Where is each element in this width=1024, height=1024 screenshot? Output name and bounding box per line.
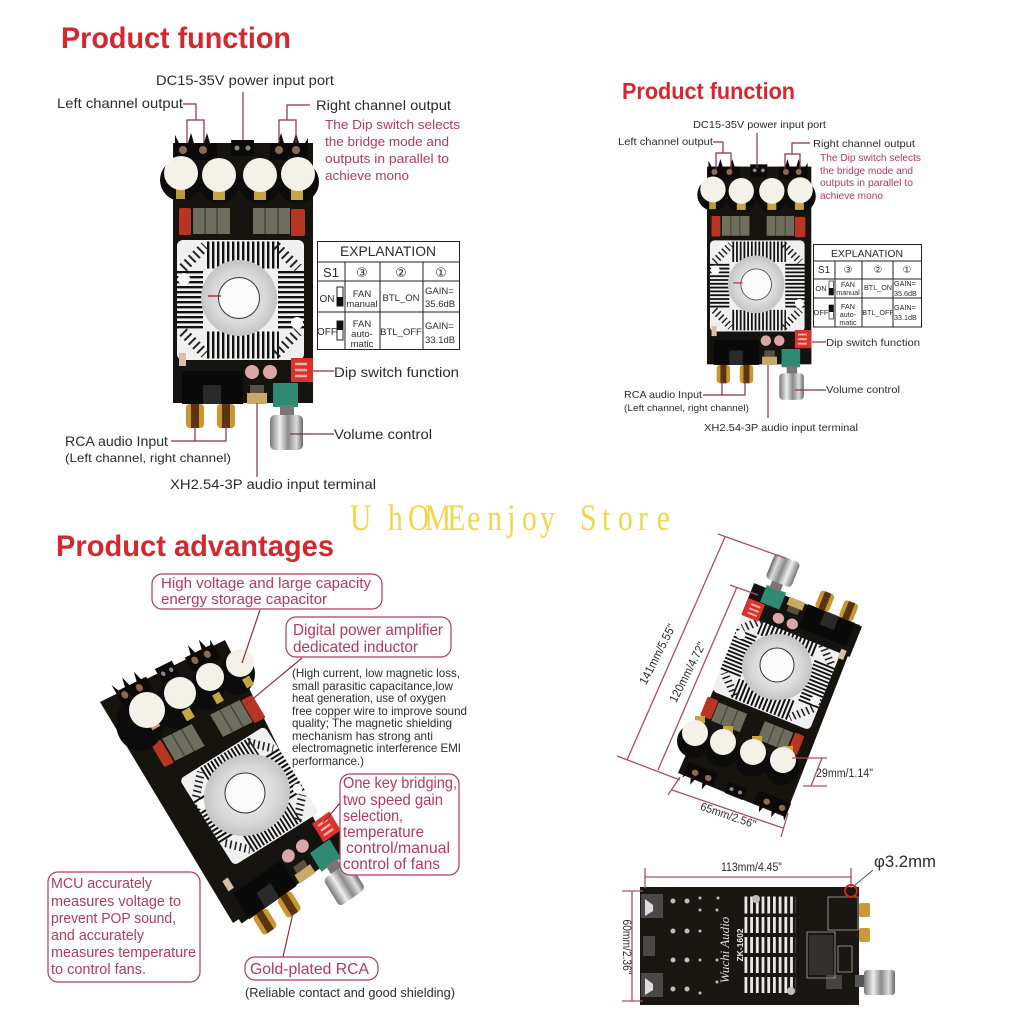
callout: gold-plated rca: Gold-plated RCA: [250, 961, 369, 978]
label: right channel output small: Right channel output: [813, 138, 915, 150]
volume knob: [855, 970, 895, 995]
text block: inductor details: electromagnetic interference EMI: [292, 741, 461, 755]
callout: mcu: measures voltage to: [51, 893, 181, 910]
table: explanation small: ON: [815, 284, 827, 293]
text block: inductor details: small parasitic capacitance,low: [292, 679, 453, 693]
label: dip switch function small: Dip switch function: [826, 337, 920, 349]
label: rca audio input small: RCA audio Input: [624, 389, 702, 401]
table: explanation small: 35.6dB: [894, 289, 917, 298]
callout: mounting hole 3.2mm: [845, 852, 936, 897]
note: dip switch mono small: the bridge mode and: [820, 166, 913, 177]
tilted board illustration: [677, 550, 875, 822]
dimension: 60mm height: 60mm/2.36": [620, 920, 632, 974]
table: explanation small: ②: [874, 265, 882, 276]
dimension: 120mm length: [658, 585, 758, 770]
table: explanation: BTL_ON: [383, 293, 420, 304]
callout: gold-plated rca: [245, 913, 378, 980]
note: dip switch mono small: outputs in parallel to: [820, 178, 913, 189]
label: right channel output small: [785, 138, 915, 170]
callout: mcu: and accurately: [51, 927, 144, 944]
callout: mounting hole 3.2mm: φ3.2mm: [874, 852, 936, 871]
text block: inductor details: performance.): [292, 754, 364, 768]
gold rca connectors: [859, 903, 870, 942]
title: product advantages: Product advantages: [56, 530, 334, 563]
callout: one key bridging: control of fans: [343, 856, 440, 873]
panel: board diagram small: [618, 119, 922, 434]
label: power input port small: [693, 119, 826, 168]
label: rca audio input: (Left channel, right channel): [65, 451, 231, 465]
table: explanation: ③: [356, 266, 368, 281]
table: explanation: 33.1dB: [425, 335, 455, 346]
dimension: 65mm width: [668, 777, 788, 837]
board illustration small: [697, 159, 816, 400]
table: explanation: matic: [351, 339, 374, 350]
panel: board rear view: [620, 852, 936, 1005]
table: explanation small: GAIN=: [894, 279, 916, 288]
note: dip switch mono: the bridge mode and: [325, 134, 449, 149]
label: xh2.54 terminal small: XH2.54-3P audio input terminal: [704, 422, 858, 434]
label: dip switch function: Dip switch function: [334, 364, 459, 380]
table: explanation: FAN: [353, 289, 371, 300]
panel: board dimensions view: [617, 534, 875, 837]
note: dip switch mono: achieve mono: [325, 168, 409, 183]
text block: inductor details: heat generation, use of oxygen: [292, 691, 446, 705]
note: dip switch mono small: achieve mono: [820, 191, 883, 202]
text block: rca note: (Reliable contact and good shielding): [245, 986, 455, 1000]
note: dip switch mono: outputs in parallel to: [325, 151, 449, 166]
table: explanation small: S1: [818, 265, 831, 276]
callout: capacitor: [152, 574, 382, 663]
text block: inductor details: [292, 666, 467, 768]
dimension: 60mm height: [620, 891, 643, 1001]
table: explanation small: EXPLANATION: [831, 248, 903, 260]
title: product function: Product function: [61, 22, 291, 55]
callout: mcu: measures temperature: [51, 944, 196, 961]
callout: mcu: to control fans.: [51, 961, 146, 978]
note: dip switch mono small: [820, 153, 921, 202]
callout: one key bridging: selection,: [343, 808, 403, 825]
table: explanation: ②: [395, 266, 407, 281]
text block: inductor details: mechanism has strong anti: [292, 729, 433, 743]
label: left channel output: Left channel output: [57, 95, 183, 111]
label: volume control: Volume control: [334, 426, 432, 442]
dimension: 113mm width: [645, 862, 851, 888]
text: brand script: Wuchi Audio: [717, 916, 732, 983]
callout: inductor: [243, 617, 451, 707]
callout: one key bridging: One key bridging,: [343, 775, 457, 792]
label: rca audio input small: [624, 380, 749, 413]
table: explanation: BTL_OFF: [380, 327, 422, 338]
dimension: 141mm length: 141mm/5.55": [636, 622, 679, 687]
table: explanation small: FAN: [841, 280, 855, 289]
table: explanation small: OFF: [814, 308, 829, 317]
table: explanation small: ①: [903, 265, 911, 276]
table: explanation: auto-: [351, 329, 373, 340]
table: explanation small: GAIN=: [894, 303, 916, 312]
table: explanation small: auto-: [840, 310, 857, 319]
label: rca audio input small: (Left channel, right channel): [624, 403, 749, 413]
label: power input port small: DC15-35V power input port: [693, 119, 826, 131]
table: explanation: ①: [435, 266, 447, 281]
table: explanation: GAIN=: [425, 286, 454, 297]
note: dip switch mono small: The Dip switch selects: [820, 153, 921, 164]
callout: mcu: [48, 872, 200, 982]
label: power input port: DC15-35V power input port: [156, 72, 334, 88]
callout: one key bridging: temperature: [343, 824, 424, 841]
callout: capacitor: energy storage capacitor: [161, 591, 327, 608]
label: volume control small: Volume control: [826, 384, 900, 396]
label: right channel output: Right channel output: [316, 97, 451, 113]
table: explanation: [317, 242, 460, 350]
table: explanation: OFF: [317, 327, 337, 338]
note: dip switch mono: The Dip switch selects: [325, 117, 461, 132]
label: xh2.54 terminal: XH2.54-3P audio input terminal: [170, 476, 376, 492]
table: explanation: 35.6dB: [425, 299, 455, 310]
table: explanation small: 33.1dB: [894, 313, 917, 322]
dimension: 29mm height: [792, 758, 873, 786]
dimension: 29mm height: 29mm/1.14": [816, 768, 873, 780]
callout: mcu: MCU accurately: [51, 875, 152, 892]
dimension: 65mm width: 65mm/2.56": [699, 801, 757, 831]
panel: advantages board: [48, 574, 467, 1000]
table: explanation small: BTL_OFF: [862, 308, 894, 317]
callout: inductor: Digital power amplifier: [293, 622, 444, 639]
title: product function small: Product function: [622, 78, 795, 104]
table: explanation small: BTL_ON: [864, 283, 892, 292]
text block: inductor details: (High current, low magnetic loss,: [292, 666, 460, 680]
table: explanation: EXPLANATION: [340, 243, 436, 259]
callout: one key bridging: two speed gain: [343, 792, 443, 809]
callout: one key bridging: [323, 774, 459, 875]
label: right channel output: [279, 97, 451, 143]
label: left channel output small: Left channel output: [618, 136, 713, 148]
label: left channel output small: [618, 136, 731, 170]
panel: board diagram large: [57, 72, 461, 492]
label: rca audio input: RCA audio Input: [65, 433, 168, 449]
label: rca audio input: [65, 423, 231, 465]
callout: mcu: prevent POP sound,: [51, 910, 176, 927]
text block: inductor details: free copper wire to improve sound: [292, 704, 467, 718]
table: explanation small: ③: [844, 265, 852, 276]
rear pcb: [640, 887, 859, 1005]
table: explanation: S1: [323, 265, 339, 280]
table: explanation small: [813, 244, 922, 327]
board illustration: [160, 133, 319, 450]
watermark: store name: U hOMEenjoy Store: [350, 498, 670, 539]
table: explanation: ON: [320, 294, 334, 305]
tilted board illustration: [100, 635, 373, 960]
dimension: 141mm length: [617, 534, 785, 780]
dimension: 120mm length: 120mm/4.72": [666, 640, 709, 705]
table: explanation: GAIN=: [425, 321, 454, 332]
table: explanation small: FAN: [841, 302, 855, 311]
callout: one key bridging: control/manual: [346, 840, 450, 857]
callout: capacitor: High voltage and large capacity: [161, 575, 372, 592]
note: dip switch mono: [325, 117, 461, 183]
label: left channel output: [57, 95, 204, 143]
table: explanation: manual: [346, 299, 378, 310]
callout: inductor: dedicated inductor: [293, 639, 419, 656]
dimension: 113mm width: 113mm/4.45": [721, 862, 782, 874]
table: explanation small: matic: [839, 318, 857, 327]
text: ZK-1602: ZK-1602: [735, 928, 745, 962]
label: volume control small: [795, 384, 900, 396]
table: explanation: FAN: [353, 319, 371, 330]
text block: inductor details: quality; The magnetic shielding: [292, 716, 452, 730]
table: explanation small: manual: [836, 288, 860, 297]
